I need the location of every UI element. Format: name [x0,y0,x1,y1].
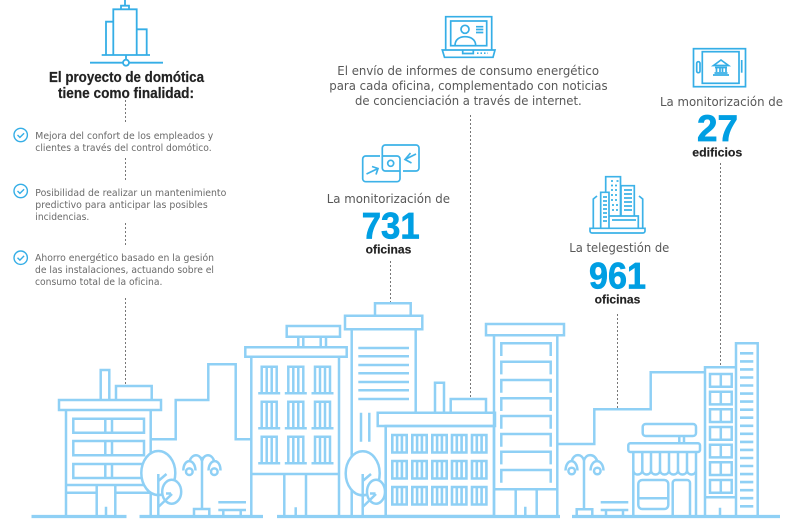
icon: office towers [90,0,163,66]
bench: left [218,502,246,516]
stat text: 731 oficinas [327,192,450,256]
text: reports description: para cada oficina, complementado con noticias [329,79,608,93]
panel: 731 offices [327,145,450,303]
building: balcony tower [486,324,564,516]
icon: tablet with bank [694,49,746,87]
bench: right [601,502,628,516]
goal: predictive maintenance: incidencias. [35,212,89,223]
text: reports description [329,64,608,108]
skyline: right backdrop [557,372,705,444]
connector: goals dotted line [124,100,126,386]
goal: energy saving: de las instalaciones, actuando sobre el [35,265,214,276]
tree: centre [346,451,385,516]
stat text: 731 oficinas: oficinas [366,244,411,256]
panel: 27 buildings [660,49,783,367]
stat text: 27 edificios: 27 [697,107,738,149]
goal: comfort [14,128,213,154]
icon: check [14,184,27,198]
building: window tower [705,367,736,516]
icon: exchange screens [363,145,419,182]
heading: project purpose: tiene como finalidad: [58,86,194,102]
panel: project goals [14,0,226,386]
stat text: 961 oficinas: 961 [589,254,646,296]
stat text: 961 oficinas: La telegestión de [569,241,669,255]
street lamp: right [566,455,604,516]
building: central tower [345,303,422,516]
street lamp: left [183,455,220,516]
connector: 961 dotted line [616,314,618,409]
tree: left [141,451,181,516]
stat text: 731 oficinas: La monitorización de [327,192,450,206]
goal: energy saving: Ahorro energético basado en la gesión [35,252,214,264]
stat text: 27 edificios [660,95,783,160]
illustration: city skyline [32,303,780,516]
building: apartment block [245,326,347,516]
stat text: 27 edificios: La monitorización de [660,95,783,109]
icon: laptop with user [442,17,495,57]
goal: comfort: clientes a través del control domótico. [35,142,212,154]
stat text: 961 oficinas: oficinas [595,294,640,306]
goal: predictive maintenance: predictivo para anticipar las posibles [35,200,208,211]
icon: check [14,128,27,142]
panel: 961 offices [569,177,669,409]
panel: energy reports [329,17,608,399]
goal: energy saving: consumo total de la oficina. [35,277,162,288]
stat text: 961 oficinas [569,241,669,306]
stat text: 731 oficinas: 731 [362,204,420,246]
building: left office [59,370,161,516]
shop [628,424,700,516]
text: reports description: El envío de informes de consumo energético [337,64,599,78]
stat text: 27 edificios: edificios [692,148,742,160]
icon: check [14,251,27,264]
heading: project purpose [49,70,205,102]
text: reports description: de concienciación a través de internet. [355,94,582,108]
building: low office [386,426,494,516]
skyline: left backdrop [151,364,251,439]
goal: comfort: Mejora del confort de los empleados y [35,131,213,142]
connector: 27 dotted line [720,163,722,367]
heading: project purpose: El proyecto de domótica [49,70,205,86]
goal: predictive maintenance [14,184,226,223]
ground line [32,515,780,518]
icon: buildings on laptop [590,177,645,233]
connector: reports dotted line [470,115,472,399]
connector: 731 dotted line [390,261,392,303]
building: slim tower [736,343,758,516]
goal: energy saving [14,251,214,288]
goal: predictive maintenance: Posibilidad de realizar un mantenimiento [35,188,226,199]
